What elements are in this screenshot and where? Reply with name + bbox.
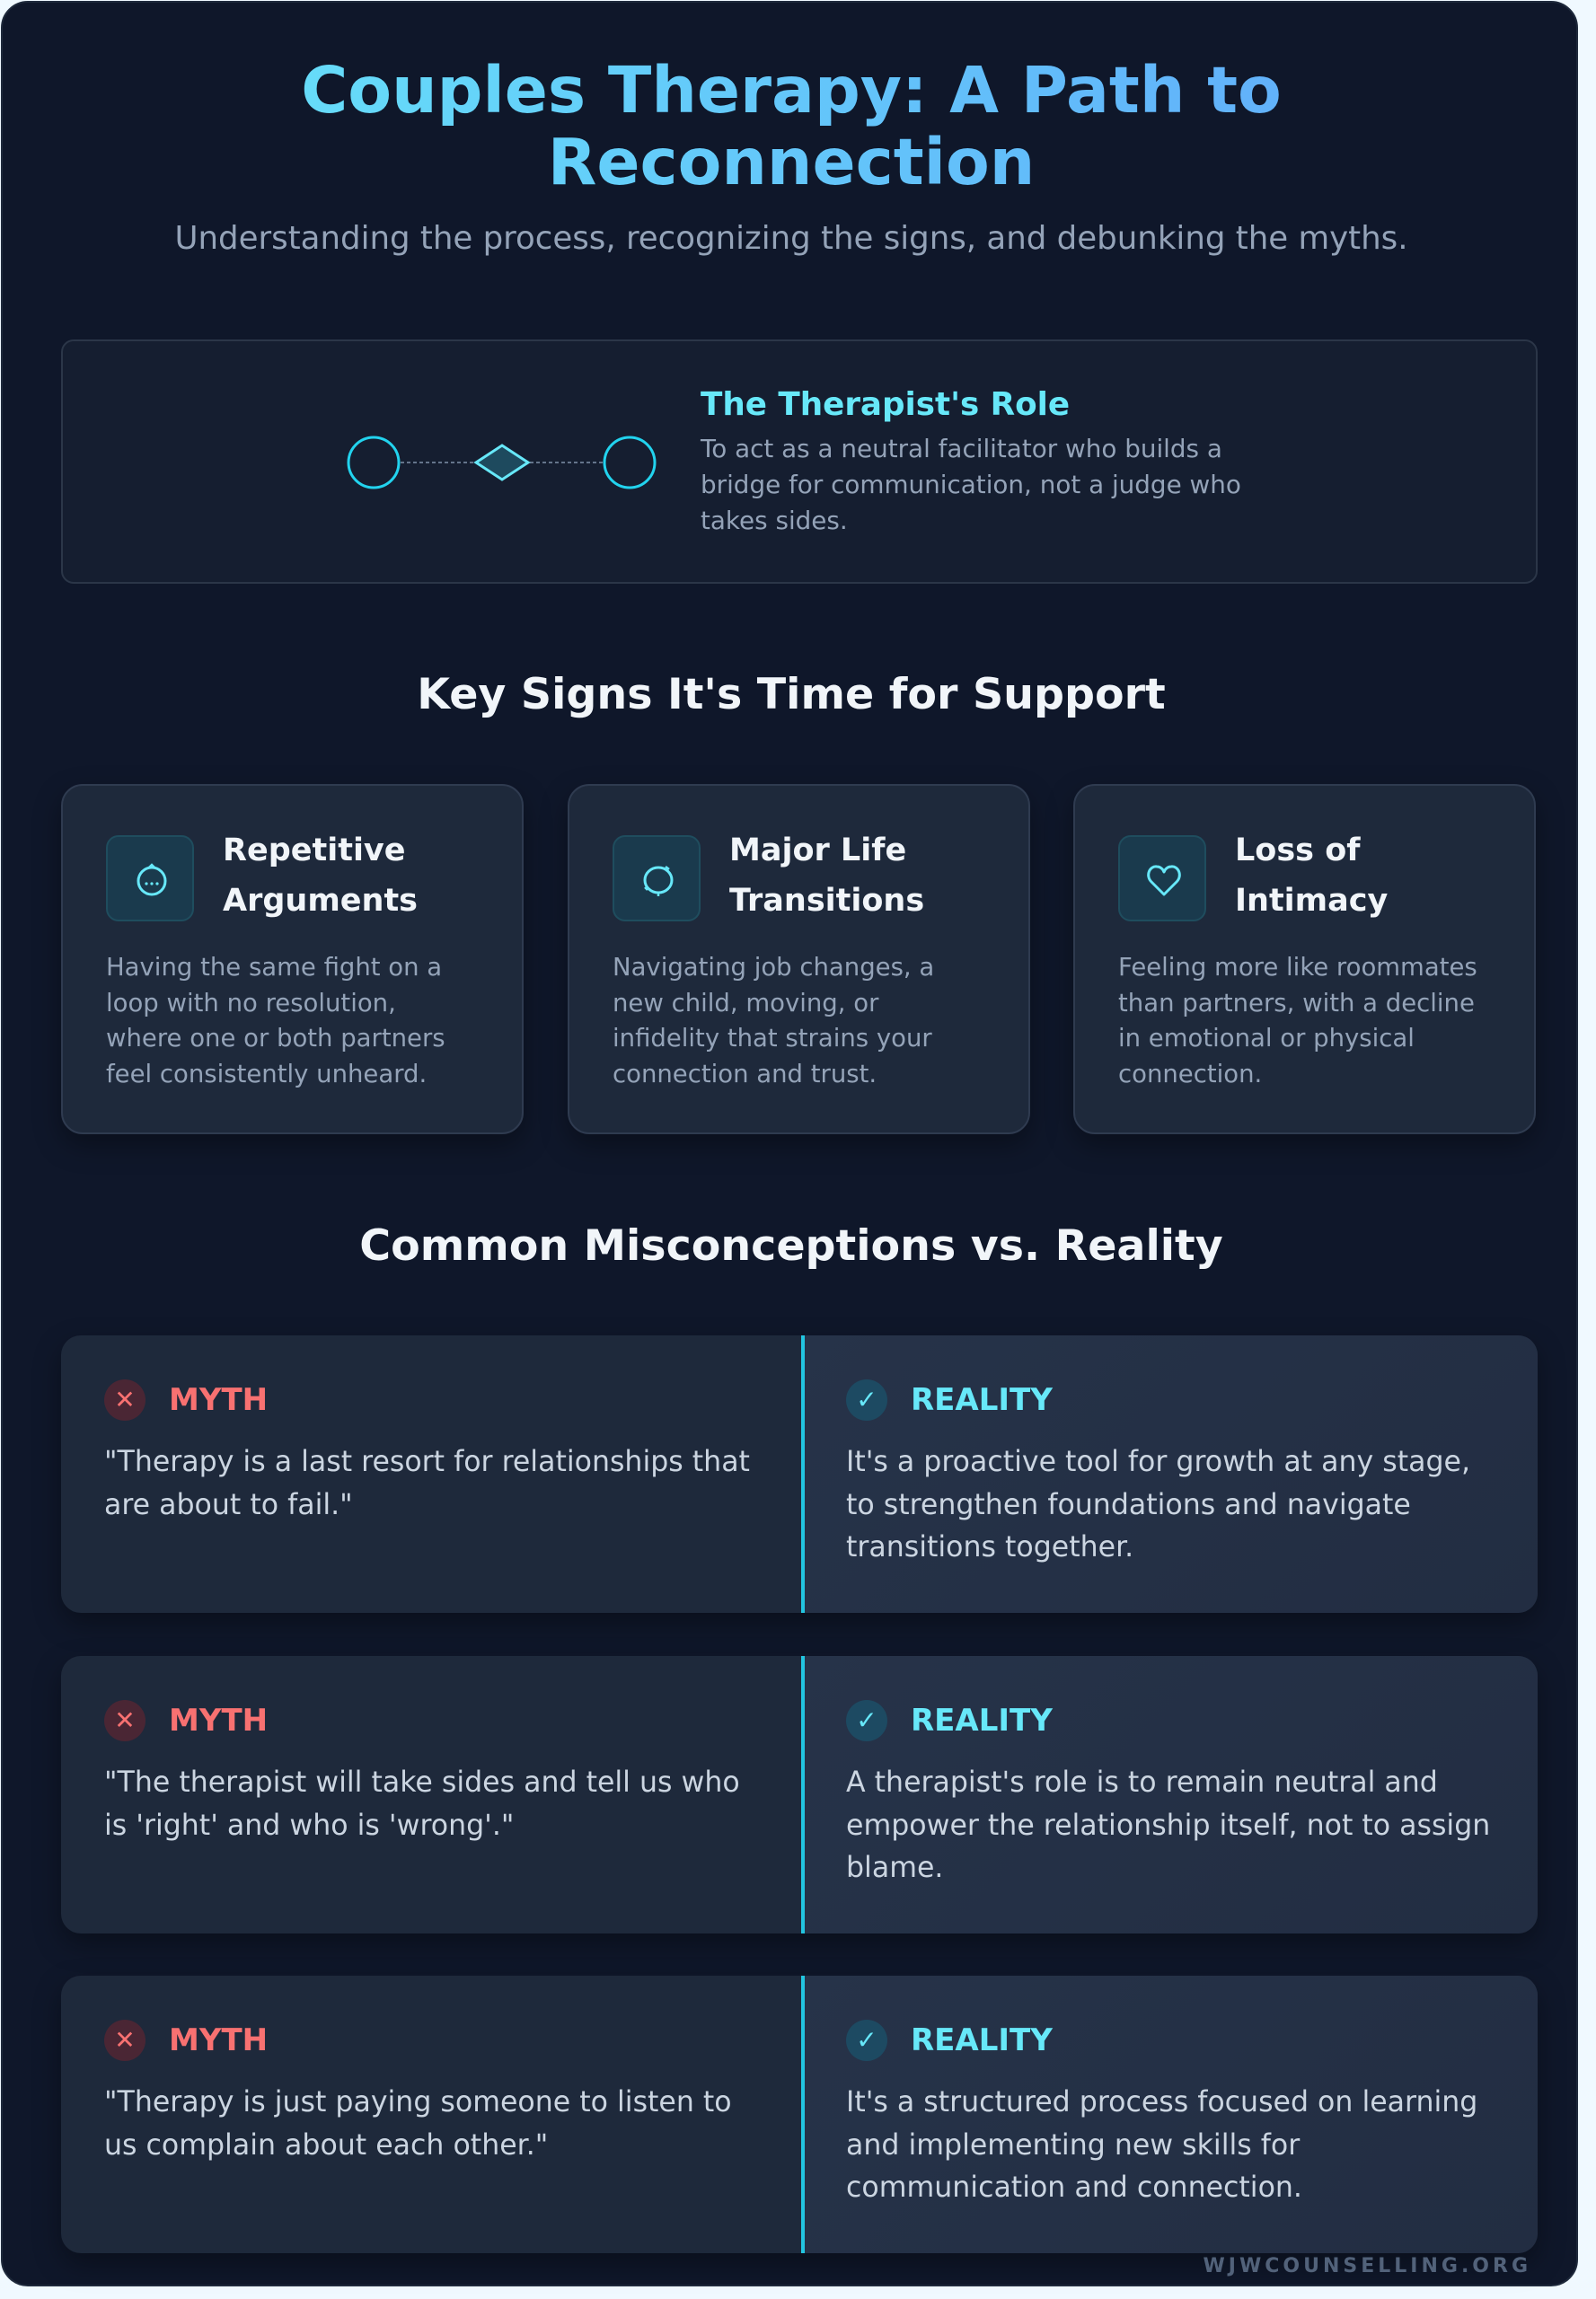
icon: heart: [1118, 835, 1206, 921]
role title: The Therapist's Role: [701, 386, 1070, 423]
myth row 2: ✓: [856, 1705, 877, 1735]
card: repetitive arguments: [61, 784, 524, 1134]
myth text: "Therapy is just paying someone to listen to us complain about each other.": [104, 2086, 732, 2161]
reality text: It's a proactive tool for growth at any stage, to strengthen foundations and navigate transitions together.: [846, 1446, 1470, 1563]
card title: Arguments: [223, 883, 418, 919]
reality text: A therapist's role is to remain neutral and empower the relationship itself, not to assign blame.: [846, 1766, 1490, 1884]
card: major life transitions: [568, 784, 1030, 1134]
card title: [729, 832, 924, 919]
myth row 1: ✓: [856, 1385, 877, 1414]
card title: Major Life: [729, 832, 906, 868]
card title: Repetitive: [223, 832, 406, 868]
card title: Transitions: [729, 883, 924, 919]
card title: Intimacy: [1235, 883, 1388, 919]
myth row 3: MYTH: [169, 2022, 268, 2058]
myth row 3: ✓: [856, 2025, 877, 2055]
card: loss of intimacy: [1073, 784, 1536, 1134]
card description: Navigating job changes, a new child, moving, or infidelity that strains your connection and trust.: [613, 953, 934, 1088]
title: [3, 55, 1580, 198]
icon: cycle: [613, 835, 701, 921]
role description: To act as a neutral facilitator who builds a bridge for communication, not a judge who takes sides.: [701, 434, 1241, 535]
myth row 3: [61, 1976, 1538, 2253]
heading: key signs: Key Signs It's Time for Support: [417, 670, 1166, 719]
myth text: "Therapy is a last resort for relationships that are about to fail.": [104, 1446, 750, 1521]
icon: conversation loop: [106, 835, 194, 921]
icon: neutral facilitator bridge: [347, 436, 656, 489]
card description: Feeling more like roommates than partners, with a decline in emotional or physical connection.: [1118, 953, 1477, 1088]
reality label: [846, 2020, 1053, 2061]
myth row 2: MYTH: [169, 1703, 268, 1739]
footer: website: WJWCOUNSELLING.ORG: [1204, 2255, 1531, 2277]
reality text: It's a structured process focused on learning and implementing new skills for communication and connection.: [846, 2086, 1477, 2204]
myth row 1: ✕: [114, 1385, 136, 1414]
card title: Loss of: [1235, 832, 1360, 868]
myth row 2: [61, 1656, 1538, 1933]
myth row 3: REALITY: [911, 2022, 1053, 2058]
myth label: [104, 1700, 268, 1741]
myth row 2: ✕: [114, 1705, 136, 1735]
title: Couples Therapy: A Path to: [301, 53, 1282, 128]
card title: [223, 832, 418, 919]
subtitle: Understanding the process, recognizing the signs, and debunking the myths.: [174, 220, 1408, 257]
myth row 1: MYTH: [169, 1382, 268, 1418]
myth text: "The therapist will take sides and tell us who is 'right' and who is 'wrong'.": [104, 1766, 740, 1841]
myth row 1: REALITY: [911, 1382, 1053, 1418]
panel: therapist's role: [61, 339, 1538, 584]
card title: [1235, 832, 1388, 919]
reality label: [846, 1700, 1053, 1741]
heading: misconceptions: Common Misconceptions vs. Reality: [359, 1221, 1223, 1271]
myth row 3: ✕: [114, 2025, 136, 2055]
myth row 2: REALITY: [911, 1703, 1053, 1739]
title: Reconnection: [548, 125, 1035, 199]
card description: Having the same fight on a loop with no resolution, where one or both partners feel consistently unheard.: [106, 953, 445, 1088]
myth label: [104, 2020, 268, 2061]
myth row 1: [61, 1335, 1538, 1613]
reality label: [846, 1379, 1053, 1421]
myth label: [104, 1379, 268, 1421]
